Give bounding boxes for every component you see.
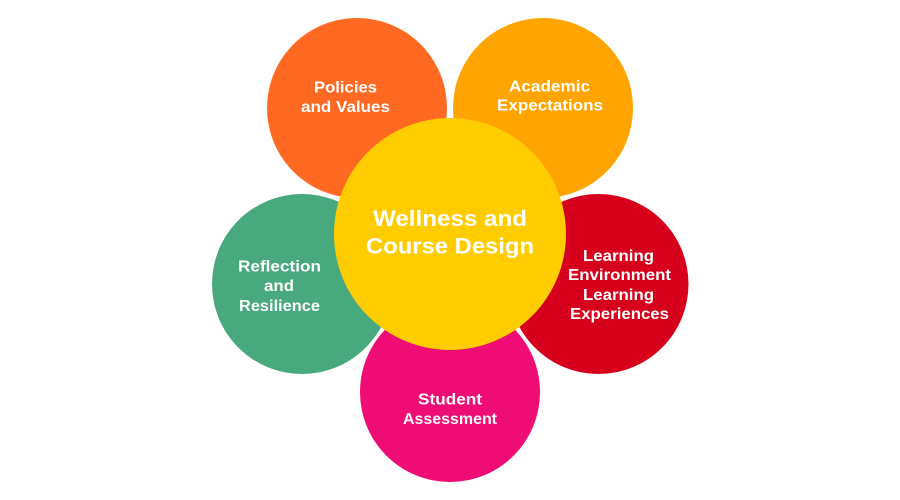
panel: policies and values: Policies [314, 80, 377, 96]
panel: central wellness and course design [334, 118, 566, 350]
panel: central wellness and course design: Course Design [366, 234, 534, 258]
panel: learning environment and experiences [508, 194, 688, 374]
panel: learning environment and experiences: Learning [583, 287, 654, 304]
panel: academic expectations: Academic [509, 78, 590, 96]
panel: reflection and resilience: Resilience [239, 298, 320, 315]
panel: reflection and resilience: Reflection [238, 258, 321, 276]
panel: central wellness and course design: Wellness and [373, 206, 527, 231]
panel: academic expectations [453, 18, 633, 198]
panel: learning environment and experiences: Environment [568, 267, 671, 284]
panel: academic expectations: Expectations [497, 98, 603, 114]
panel: reflection and resilience: and [264, 278, 294, 295]
panel: policies and values: and Values [301, 99, 390, 116]
panel: reflection and resilience [212, 194, 392, 374]
panel: student assessment: Student [418, 392, 482, 408]
panel: learning environment and experiences: Learning [583, 248, 654, 265]
panel: policies and values [267, 18, 447, 198]
panel: learning environment and experiences: Experiences [570, 306, 669, 323]
panel: student assessment [360, 302, 540, 482]
panel: student assessment: Assessment [403, 411, 497, 428]
